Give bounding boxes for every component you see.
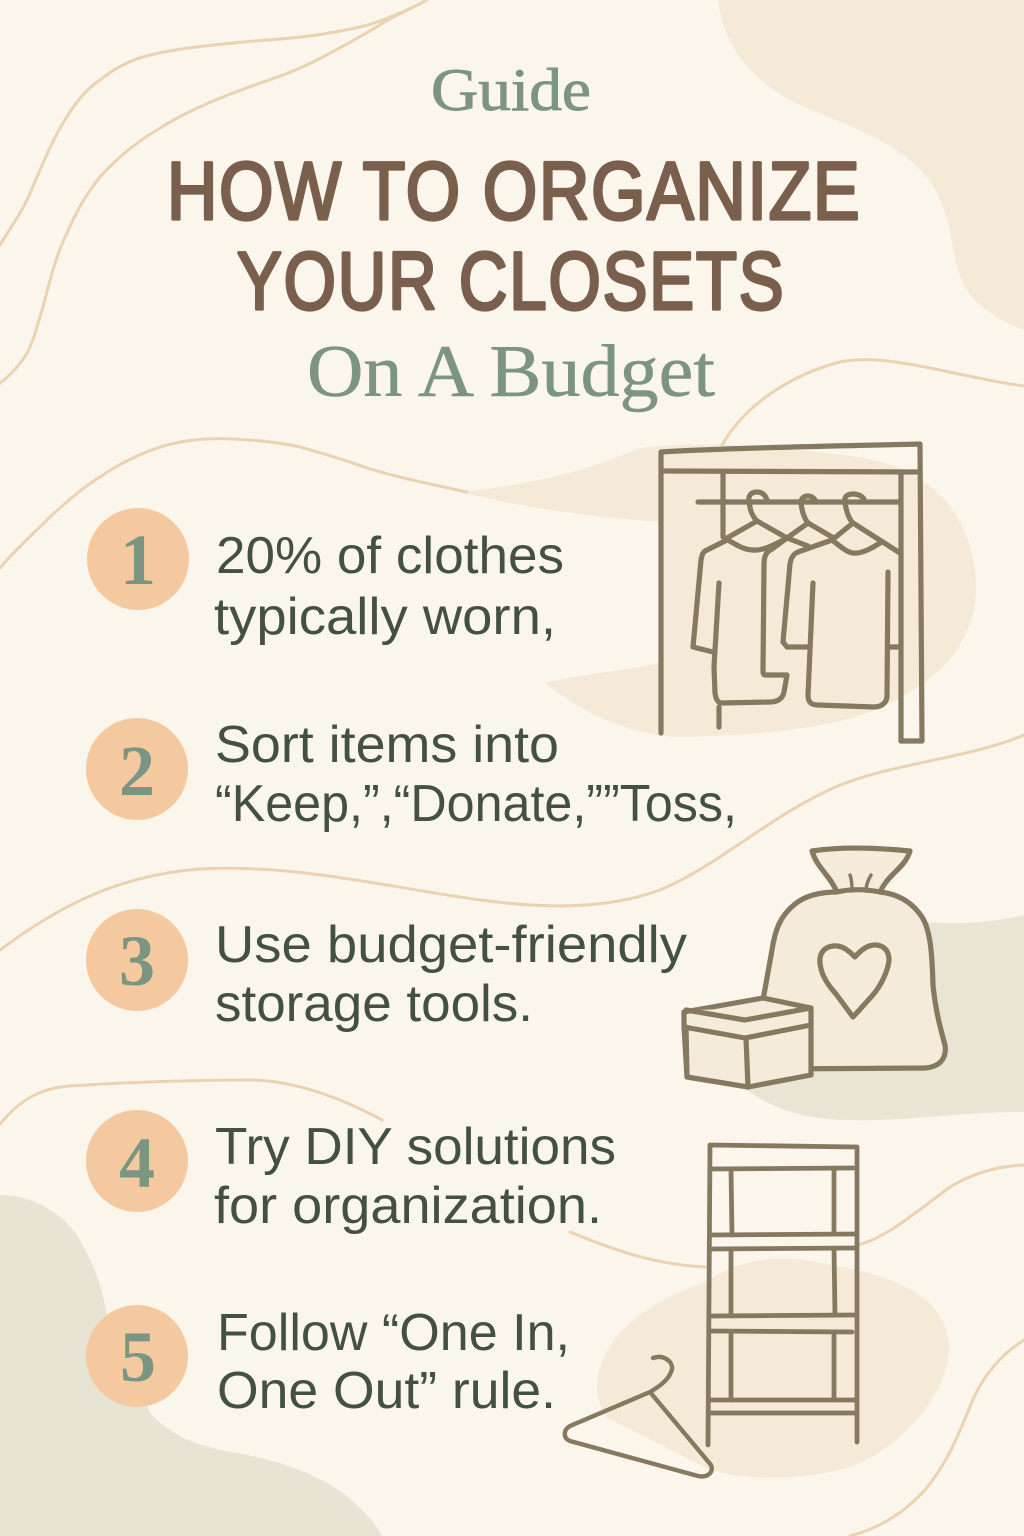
- step 3: [86, 909, 687, 1033]
- step 1 text: 20% of clothes: [216, 527, 564, 585]
- hanger 1: [727, 492, 808, 550]
- number badge 2: 2: [119, 731, 155, 811]
- number badge 4: [86, 1110, 188, 1212]
- step 1 text: typically worn,: [214, 588, 556, 646]
- heading line 2: YOUR CLOSETS: [237, 235, 785, 326]
- step 2 text: [215, 716, 737, 833]
- number badge 1: [87, 508, 189, 610]
- step 5: [86, 1304, 570, 1420]
- background blob: behind closet: [462, 445, 976, 737]
- subtitle: On A Budget: On A Budget: [307, 331, 715, 413]
- number badge 1: 1: [120, 520, 156, 600]
- step 2: [86, 716, 737, 833]
- step 5 text: [217, 1304, 570, 1420]
- bag: [763, 848, 945, 1069]
- icon: wire hanger: [565, 1357, 712, 1476]
- icon: closet with hanging clothes: [661, 444, 922, 741]
- step 1: [87, 508, 564, 646]
- step 2 text: Sort items into: [215, 716, 559, 774]
- hanger 2: [787, 496, 832, 538]
- step 3 text: storage tools.: [215, 975, 533, 1033]
- step 4 text: for organization.: [214, 1177, 602, 1235]
- step 5 text: Follow “One In,: [217, 1304, 570, 1362]
- icon: donation bag and box: [684, 848, 945, 1087]
- background blob: behind bag: [745, 915, 1024, 1120]
- step 3 text: Use budget-friendly: [215, 916, 687, 974]
- number badge 4: 4: [119, 1123, 155, 1203]
- step 2 text: “Keep,”,“Donate,””Toss,: [215, 775, 737, 833]
- garment 2: [783, 540, 900, 707]
- hanger 3: [832, 494, 900, 553]
- number badge 3: [86, 909, 188, 1011]
- heading line 1: HOW TO ORGANIZE: [167, 146, 861, 237]
- background blob: top right: [718, 0, 1024, 330]
- step 1 text: [214, 527, 564, 646]
- title block: [167, 57, 861, 413]
- background blob: behind shelf: [597, 1259, 949, 1478]
- garment 1: [693, 538, 787, 703]
- number badge 2: [86, 718, 188, 820]
- background blob: bottom left: [0, 1195, 382, 1536]
- step 5 text: One Out” rule.: [217, 1362, 556, 1420]
- number badge 5: 5: [120, 1317, 156, 1397]
- icon: shelving unit: [708, 1145, 857, 1445]
- step 4: [86, 1110, 616, 1235]
- storage box: [684, 998, 811, 1087]
- step 4 text: Try DIY solutions: [215, 1118, 616, 1176]
- step 3 text: [215, 916, 687, 1033]
- number badge 3: 3: [119, 921, 155, 1001]
- eyebrow: Guide: Guide: [431, 57, 591, 123]
- number badge 5: [86, 1305, 188, 1407]
- step 4 text: [214, 1118, 616, 1235]
